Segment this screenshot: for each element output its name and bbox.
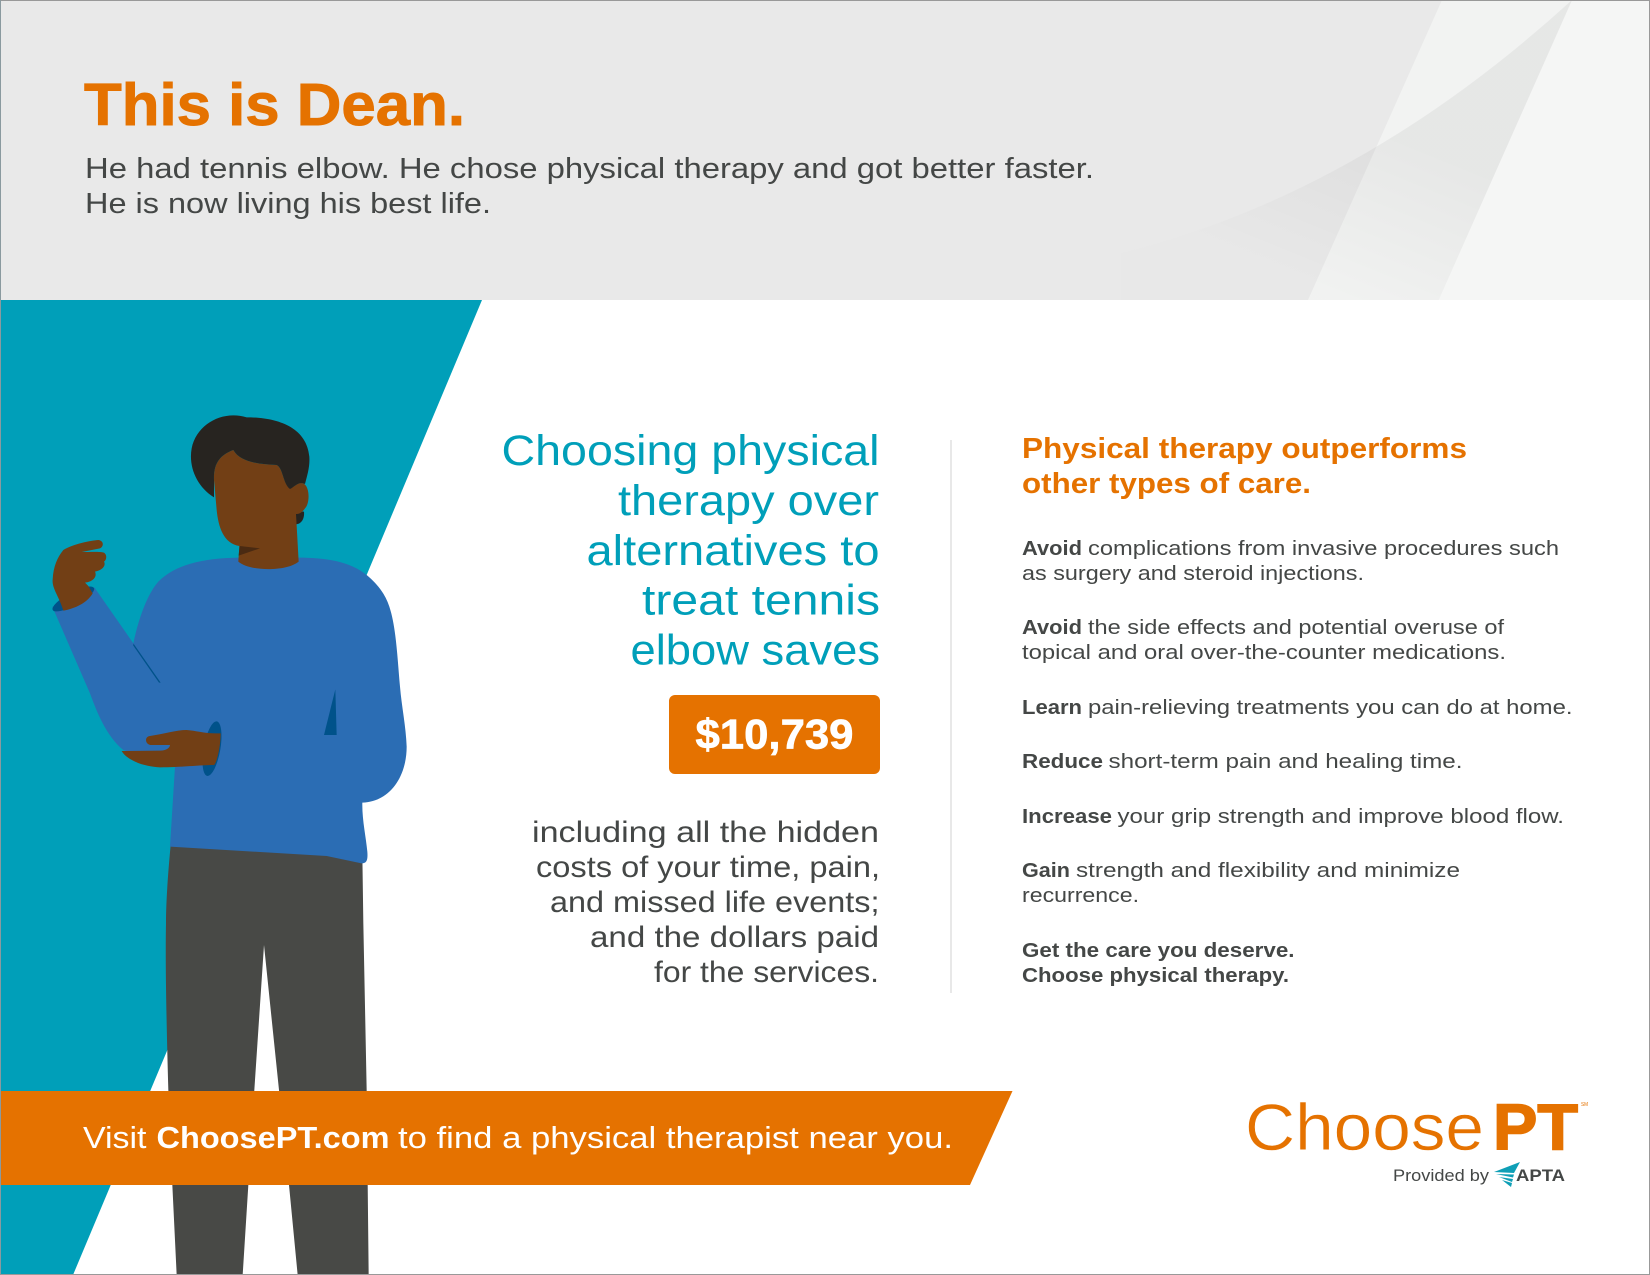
illustration: Dean [50,415,407,1275]
logo: ChoosePT provided by APTA: Choose [1245,1090,1484,1164]
savings explanation text: for the services. [654,956,879,989]
benefit: learn: pain-relieving treatments you can do at home. [1088,696,1572,719]
title: This is Dean. [84,72,465,138]
logo: ChoosePT provided by APTA: APTA [1516,1166,1565,1185]
closing statement: Choose physical therapy. [1022,964,1289,987]
savings explanation text: and missed life events; [550,886,880,919]
benefit: gain [1022,859,1460,907]
icon: APTA wing [1494,1162,1520,1187]
header subtitle: He is now living his best life. [85,188,491,220]
call-to-action banner: ChoosePT.com [156,1120,390,1155]
right column heading [1022,433,1467,500]
logo: ChoosePT provided by APTA: PT [1493,1092,1578,1164]
benefit: avoid complications [1022,537,1559,585]
benefit: avoid side effects: Avoid [1022,616,1082,639]
closing statement: Get the care you deserve. [1022,939,1294,962]
benefit: gain: recurrence. [1022,884,1139,907]
benefits list [1022,537,1572,987]
raised hand [53,540,106,611]
savings badge [669,695,880,774]
benefit: reduce [1022,750,1462,773]
savings explanation text: including all the hidden [532,816,879,849]
logo: ChoosePT provided by APTA: Provided by [1393,1166,1490,1185]
benefit: reduce: short-term pain and healing time. [1108,750,1462,773]
right column heading: other types of care. [1022,468,1311,500]
header subtitle: He had tennis elbow. He chose physical therapy and got better faster. [85,153,1094,185]
right column heading: Physical therapy outperforms [1022,433,1467,465]
call-to-action banner [0,1091,1012,1185]
savings explanation text [532,816,880,989]
panel: header background [0,0,1650,300]
hair [191,415,309,497]
benefit: gain: Gain [1022,859,1070,882]
neck shadow [239,546,260,556]
benefit: increase: Increase [1022,805,1112,828]
savings explanation text: costs of your time, pain, [536,851,880,884]
call-to-action banner: Visit [83,1120,147,1155]
benefit: avoid side effects [1022,616,1506,664]
teal heading: elbow saves [630,626,880,674]
panel: teal background shape [0,300,482,1275]
benefit: avoid complications: complications from invasive procedures such [1088,537,1559,560]
benefit: avoid side effects: the side effects and potential overuse of [1088,616,1504,639]
head and neck [214,450,309,569]
trousers [166,845,369,1275]
teal heading: Choosing physical [502,427,880,475]
benefit: increase: your grip strength and improve blood flow. [1118,805,1564,828]
benefit: reduce: Reduce [1022,750,1103,773]
benefit: learn: Learn [1022,696,1082,719]
header subtitle [85,153,1094,220]
teal heading: treat tennis [642,576,880,624]
teal heading: therapy over [618,477,879,525]
teal heading: alternatives to [586,527,880,575]
sweater [50,415,407,863]
teal heading [502,427,880,674]
savings badge: $10,739 [696,710,854,758]
savings explanation text: and the dollars paid [590,921,879,954]
sleeve and shirt creases [133,643,161,683]
lower hand [122,730,221,767]
benefit: gain: strength and flexibility and minimize [1076,859,1460,882]
benefit: avoid side effects: topical and oral over-the-counter medications. [1022,641,1506,664]
hair back [295,512,304,524]
benefit: avoid complications: as surgery and steroid injections. [1022,562,1364,585]
logo: ChoosePT provided by APTA [1245,1090,1588,1187]
logo: ChoosePT provided by APTA: SM [1581,1102,1588,1108]
benefit: avoid complications: Avoid [1022,537,1082,560]
call-to-action banner: to find a physical therapist near you. [398,1120,953,1155]
closing statement [1022,939,1294,987]
